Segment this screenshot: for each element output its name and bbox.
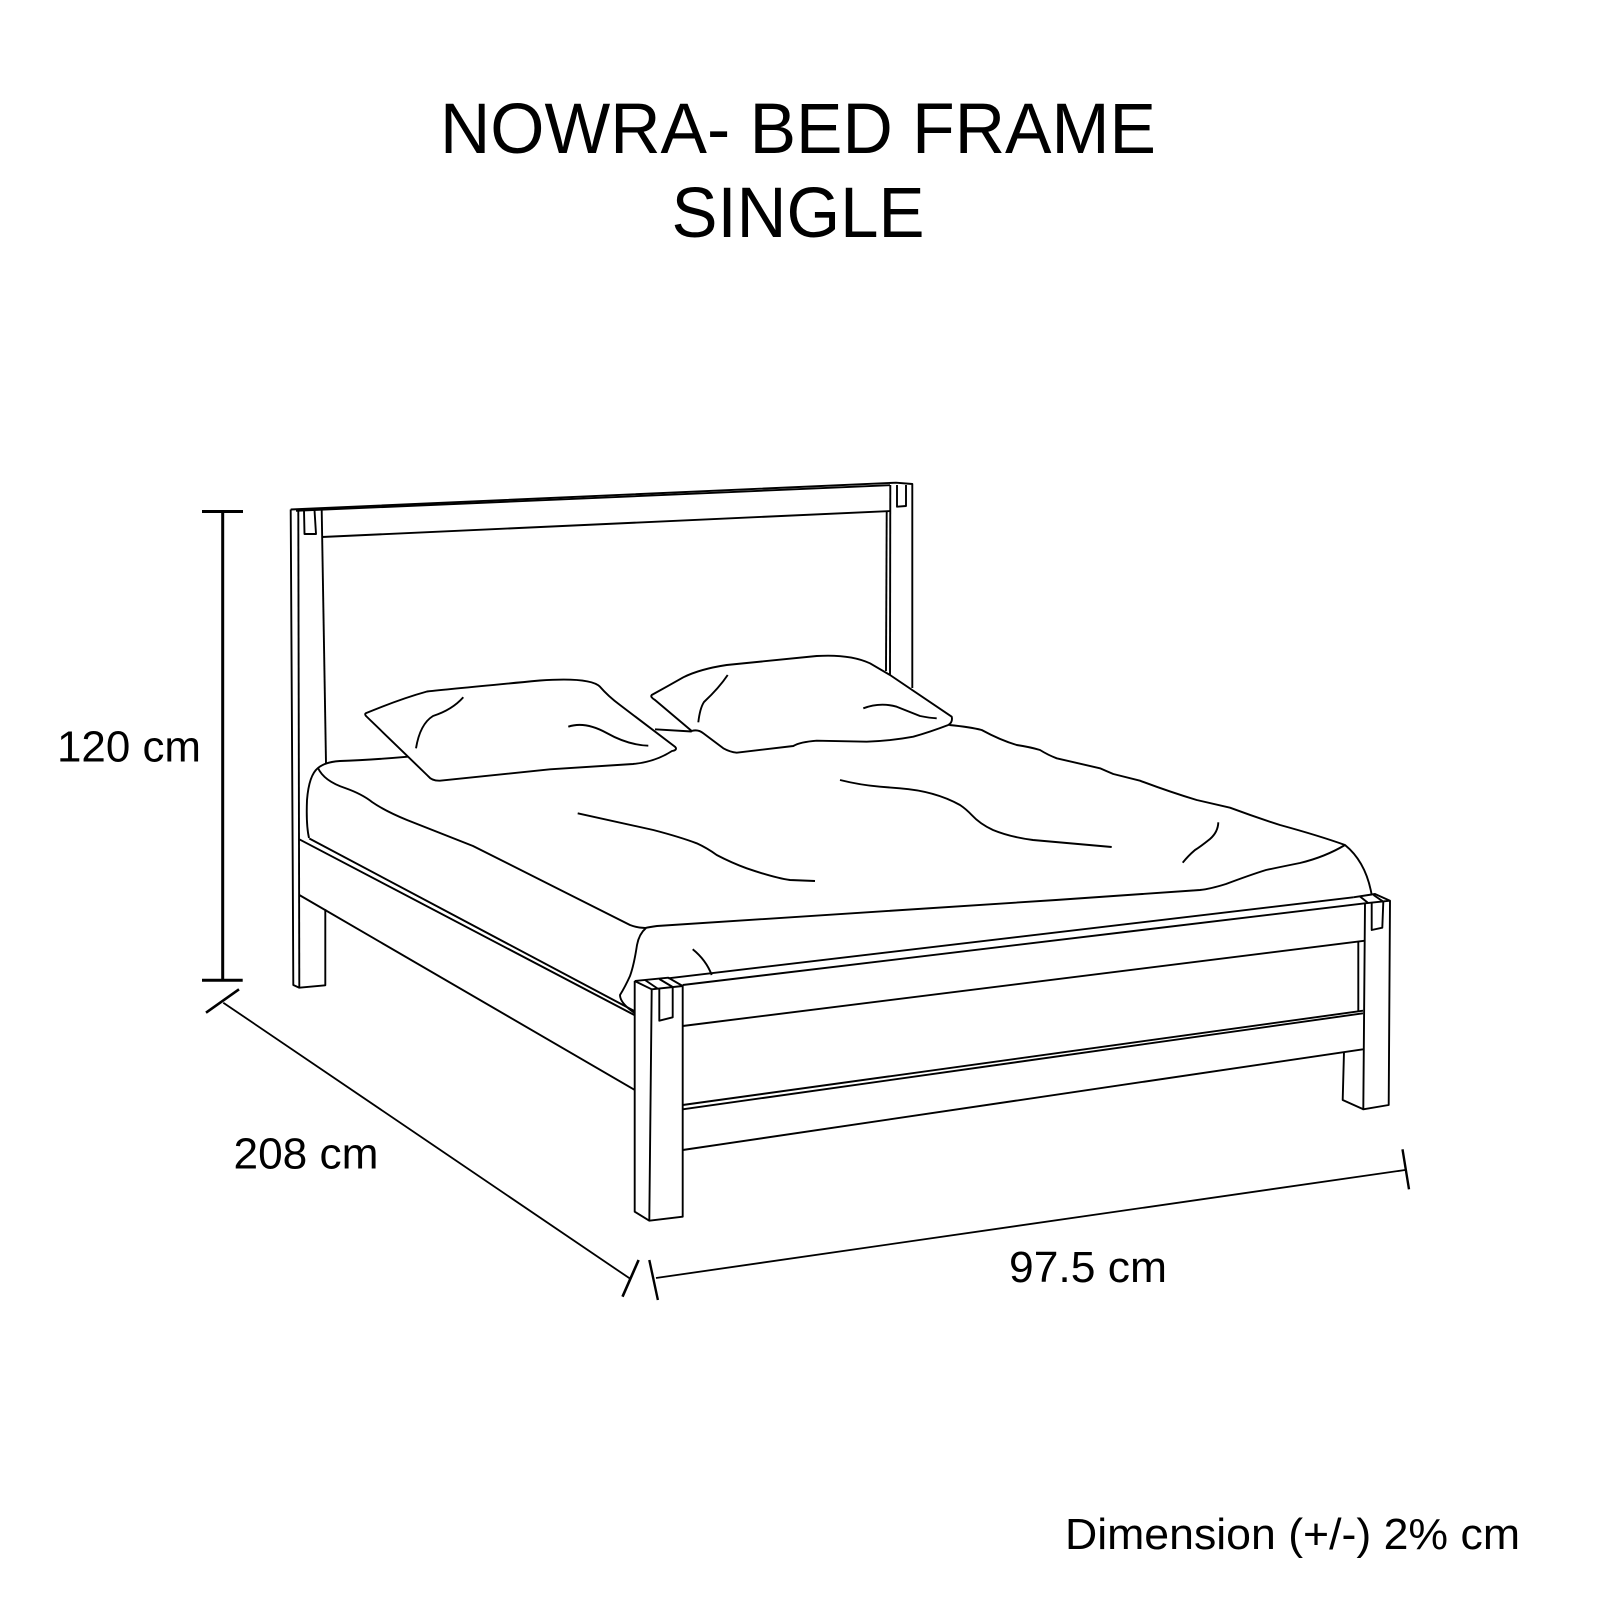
mattress and sheet [307, 725, 1372, 1013]
pillow left [365, 680, 676, 781]
side rail [299, 838, 634, 1090]
footboard [668, 897, 1365, 1150]
title [440, 90, 1156, 253]
dimension: height 120 cm: 120 cm [57, 722, 201, 772]
dimension: length 208 cm [206, 989, 639, 1297]
tolerance note: Dimension (+/-) 2% cm [1065, 1510, 1520, 1559]
title: SINGLE [672, 174, 924, 253]
title: NOWRA- BED FRAME [440, 90, 1156, 169]
dimension: height 120 cm [57, 512, 243, 980]
left front post [635, 978, 683, 1221]
bed illustration [291, 483, 1390, 1221]
pillow right [651, 656, 952, 753]
dimension: width 97.5 cm [649, 1149, 1409, 1300]
headboard [291, 483, 912, 988]
dimension: length 208 cm: 208 cm [234, 1130, 378, 1178]
right front post [1343, 894, 1390, 1109]
dimension: width 97.5 cm: 97.5 cm [1009, 1243, 1167, 1292]
